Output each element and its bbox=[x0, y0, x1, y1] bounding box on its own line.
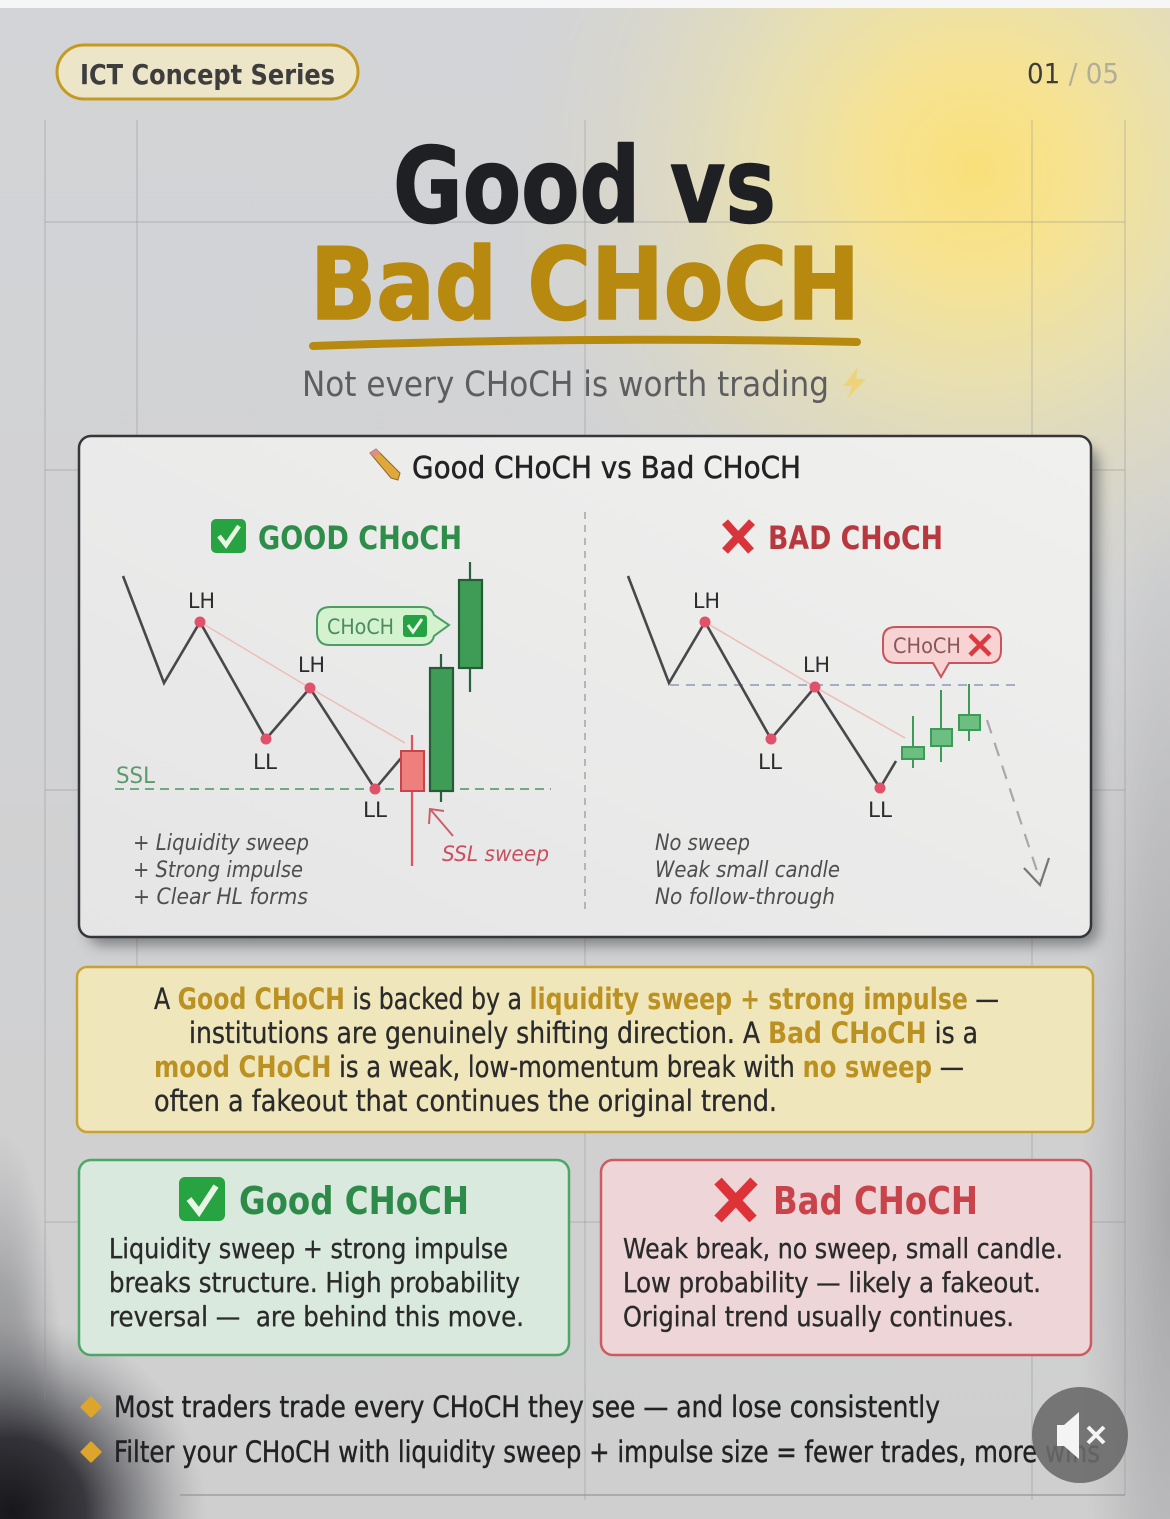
swing labels: LH bbox=[693, 589, 720, 613]
panel shadow bbox=[88, 448, 1098, 945]
bad points list: No follow-through bbox=[655, 884, 835, 910]
SSL level: SSL bbox=[116, 764, 156, 789]
heading: Good CHoCH bbox=[239, 1179, 469, 1223]
panel: summary callout: often a fakeout that continues the original trend. bbox=[154, 1084, 777, 1118]
icon: green check bbox=[179, 1177, 225, 1221]
SSL sweep annotation: SSL sweep bbox=[442, 842, 549, 866]
bullet 1: Most traders trade every CHoCH they see — and lose consistently bbox=[114, 1390, 940, 1424]
icon: red cross bbox=[718, 1181, 754, 1219]
swing labels bbox=[188, 589, 387, 822]
icon: green check bbox=[211, 519, 246, 553]
body text bbox=[623, 1232, 1063, 1333]
icon: lightning bolt bbox=[843, 367, 866, 399]
swing labels: LH bbox=[803, 653, 830, 677]
chart: good CHoCH bbox=[115, 562, 551, 910]
body text: Original trend usually continues. bbox=[623, 1300, 1014, 1333]
good points list: + Strong impulse bbox=[133, 857, 303, 883]
swing labels bbox=[693, 589, 892, 822]
title underline bbox=[313, 340, 857, 346]
swing points bbox=[194, 616, 380, 794]
swing labels: LL bbox=[868, 798, 892, 822]
icon: muted speaker button bbox=[1032, 1387, 1128, 1483]
CHoCH callout bbox=[883, 627, 1001, 677]
panel: summary callout: institutions are genuinely shifting direction. A Bad CHoCH is a bbox=[189, 1016, 978, 1050]
body text: breaks structure. High probability bbox=[109, 1266, 520, 1299]
trendline bbox=[705, 622, 905, 738]
red sweep candle bbox=[401, 735, 424, 866]
price path bbox=[123, 576, 402, 789]
CHoCH callout: CHoCH bbox=[893, 634, 961, 658]
bad heading: BAD CHoCH bbox=[768, 519, 943, 557]
price path bbox=[628, 576, 896, 788]
dashed break level bbox=[670, 684, 1018, 686]
page counter: 01 / 05 bbox=[1027, 57, 1119, 90]
swing labels: LL bbox=[758, 750, 782, 774]
takeaway bullets bbox=[82, 1390, 1100, 1469]
icon: red cross bbox=[725, 522, 752, 551]
swing points bbox=[700, 616, 886, 794]
CHoCH callout: CHoCH bbox=[327, 615, 394, 639]
body text: reversal — are behind this move. bbox=[109, 1300, 524, 1333]
good heading: GOOD CHoCH bbox=[258, 519, 462, 557]
panel: good summary bbox=[79, 1160, 569, 1355]
panel: bad summary bbox=[601, 1160, 1091, 1355]
SSL sweep annotation bbox=[429, 809, 549, 866]
series badge bbox=[57, 45, 358, 99]
panel: comparison chart bbox=[79, 436, 1091, 937]
bad points list bbox=[655, 830, 840, 910]
panel: summary callout: A Good CHoCH is backed by a liquidity sweep + strong impulse — bbox=[154, 982, 999, 1016]
swing labels: LL bbox=[363, 798, 387, 822]
panel: summary callout bbox=[77, 967, 1093, 1132]
panel heading: Good CHoCH vs Bad CHoCH bbox=[412, 451, 801, 486]
bad points list: Weak small candle bbox=[655, 857, 840, 883]
good points list: + Clear HL forms bbox=[133, 884, 308, 910]
title line 1: Good vs bbox=[393, 125, 776, 247]
green continuation candle bbox=[459, 562, 482, 692]
subtitle: Not every CHoCH is worth trading bbox=[302, 365, 829, 405]
center divider bbox=[584, 512, 586, 912]
green impulse candle bbox=[430, 654, 453, 802]
swing labels: LL bbox=[253, 750, 277, 774]
panel: summary callout: mood CHoCH is a weak, low-momentum break with no sweep — bbox=[154, 1050, 964, 1084]
icon: pencil bbox=[370, 449, 400, 480]
heading: Bad CHoCH bbox=[773, 1179, 978, 1223]
dashed continuation arrow bbox=[987, 720, 1049, 885]
body text: Liquidity sweep + strong impulse bbox=[109, 1232, 508, 1265]
bad heading bbox=[725, 519, 943, 557]
title line 2: Bad CHoCH bbox=[310, 226, 860, 343]
body text bbox=[109, 1232, 524, 1333]
swing labels: LH bbox=[188, 589, 215, 613]
swing labels: LH bbox=[298, 653, 325, 677]
small green candles bbox=[902, 684, 980, 768]
good points list bbox=[133, 830, 309, 910]
CHoCH callout bbox=[317, 607, 449, 645]
chart: bad CHoCH bbox=[628, 576, 1049, 910]
body text: Low probability — likely a fakeout. bbox=[623, 1266, 1041, 1299]
body text: Weak break, no sweep, small candle. bbox=[623, 1232, 1063, 1265]
bad points list: No sweep bbox=[655, 830, 750, 856]
trendline bbox=[200, 622, 405, 743]
good points list: + Liquidity sweep bbox=[133, 830, 309, 856]
series badge: ICT Concept Series bbox=[80, 58, 335, 91]
